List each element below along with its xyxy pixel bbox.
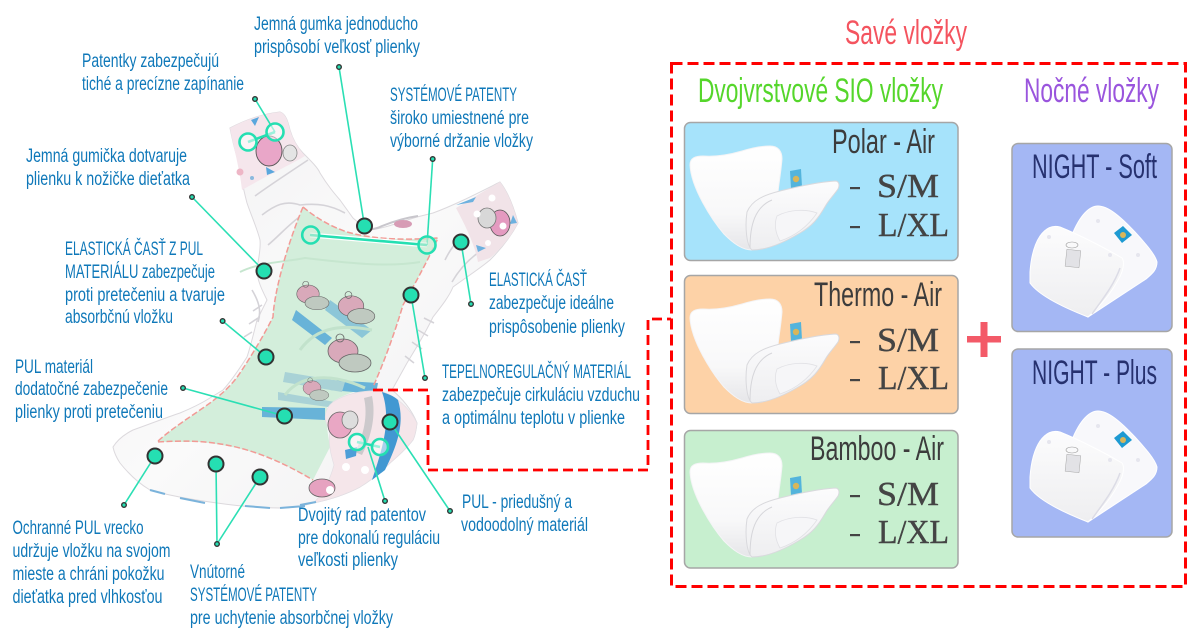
- text: protective pocket: udržuje vložku na svojom: [12, 541, 170, 562]
- text: leg elastic: plienku k nožičke dieťatka: [26, 169, 190, 190]
- text: system snaps: SYSTÉMOVÉ PATENTY: [390, 85, 517, 106]
- icon: insert: [690, 453, 839, 557]
- panel: Bamboo - Air: S/M: [877, 476, 939, 513]
- text: protective pocket: mieste a chráni pokožku: [12, 564, 164, 585]
- text: PUL material: PUL materiál: [15, 357, 93, 378]
- text: system snaps: [390, 85, 533, 152]
- panel: Bamboo - Air: [684, 430, 958, 568]
- text: double snaps: pre dokonalú reguláciu: [298, 528, 440, 549]
- inner print: [262, 310, 378, 420]
- diaper illustration: [113, 112, 518, 508]
- text: system snaps: široko umiestnené pre: [390, 108, 529, 129]
- text: snaps: [82, 51, 244, 95]
- text: protective pocket: [12, 518, 170, 608]
- panel: NIGHT - Plus: [1012, 349, 1172, 537]
- text: gentle elastic: [254, 14, 420, 58]
- text: PUL elastic part: ELASTICKÁ ČASŤ Z PUL: [65, 238, 203, 260]
- text: double snaps: veľkosti plienky: [298, 550, 398, 571]
- bottom edge trim: [150, 490, 316, 508]
- text: PUL elastic part: MATERIÁLU zabezpečuje: [65, 262, 215, 283]
- dashed seam: [157, 207, 438, 480]
- left tab print: [230, 112, 305, 190]
- text: PUL elastic part: [65, 238, 225, 328]
- callout markers: [122, 65, 473, 546]
- text: PUL material: plienky proti pretečeniu: [15, 402, 163, 423]
- text: leg elastic: Jemná gumička dotvaruje: [26, 146, 187, 167]
- text: inner system snaps: SYSTÉMOVÉ PATENTY: [190, 585, 317, 606]
- text: PUL elastic part: absorbčnú vložku: [65, 307, 173, 328]
- text: PUL elastic part: proti pretečeniu a tvaruje: [65, 285, 225, 306]
- main heading: Savé vložky: [845, 14, 967, 52]
- panel: Thermo - Air: [684, 276, 958, 414]
- panel: Polar - Air: L/XL: [878, 207, 949, 244]
- text: gentle elastic: prispôsobí veľkosť plienky: [254, 37, 420, 58]
- text: double snaps: [298, 505, 440, 571]
- text: inner system snaps: pre uchytenie absorbčnej vložky: [190, 608, 393, 629]
- text: protective pocket: dieťatka pred vlhkosťou: [12, 587, 162, 608]
- text: gentle elastic: Jemná gumka jednoducho: [254, 14, 418, 35]
- text: inner system snaps: [190, 562, 393, 629]
- text: double snaps: Dvojitý rad patentov: [298, 505, 426, 526]
- icon: night insert: [1030, 206, 1157, 317]
- heading: SIO inserts: Dvojvrstvové SIO vložky: [698, 72, 943, 110]
- text: elastic part: [489, 269, 625, 338]
- text: thermoregulating material: zabezpečuje cirkuláciu vzduchu: [442, 385, 640, 406]
- waist ruffle: [360, 216, 418, 229]
- text: thermoregulating material: TEPELNOREGULAČNÝ MATERIÁL: [442, 361, 631, 383]
- icon: plus: [967, 322, 1001, 357]
- text: elastic part: zabezpečuje ideálne: [489, 293, 614, 314]
- connector lines: [124, 67, 471, 544]
- right tab print: [456, 182, 518, 262]
- panel: NIGHT - Soft: [1012, 144, 1172, 332]
- text: thermoregulating material: [442, 361, 640, 429]
- text: elastic part: prispôsobenie plienky: [489, 317, 625, 338]
- text: breathable PUL: PUL - priedušný a: [462, 492, 572, 513]
- text: PUL material: dodatočné zabezpečenie: [15, 379, 168, 400]
- shell folds and ruffles: [244, 160, 482, 363]
- icon: night insert: [1030, 411, 1157, 522]
- text: breathable PUL: [461, 492, 588, 536]
- text: thermoregulating material: a optimálnu teplotu v plienke: [442, 408, 625, 429]
- red dashed connector: [373, 319, 671, 470]
- snap rings: [240, 124, 436, 455]
- panel: Thermo - Air: L/XL: [878, 360, 949, 397]
- icon: insert: [690, 146, 839, 250]
- text: protective pocket: Ochranné PUL vrecko: [12, 518, 144, 539]
- panel: Thermo - Air: S/M: [877, 322, 939, 359]
- panel: Polar - Air: S/M: [877, 168, 939, 205]
- text: snaps: tiché a precízne zapínanie: [82, 74, 244, 95]
- text: system snaps: výborné držanie vložky: [390, 131, 533, 152]
- panel: Bamboo - Air: L/XL: [878, 514, 949, 551]
- text: breathable PUL: vodoodolný materiál: [461, 515, 588, 536]
- red dashed frame: [672, 64, 1186, 586]
- diaper shell: [113, 112, 518, 508]
- panel: Polar - Air: Polar - Air: [832, 123, 935, 161]
- panel: Polar - Air: [684, 122, 958, 260]
- text: PUL material: [15, 357, 168, 423]
- panel: Bamboo - Air: Bamboo - Air: [810, 430, 944, 468]
- text: inner system snaps: Vnútorné: [190, 562, 245, 583]
- green inner lining: [157, 207, 438, 480]
- text: leg elastic: [26, 146, 190, 190]
- panel: Thermo - Air: Thermo - Air: [814, 276, 942, 314]
- front flap: [313, 391, 417, 503]
- text: snaps: Patentky zabezpečujú: [82, 51, 219, 72]
- text: elastic part: ELASTICKÁ ČASŤ: [489, 269, 587, 291]
- icon: insert: [690, 299, 839, 403]
